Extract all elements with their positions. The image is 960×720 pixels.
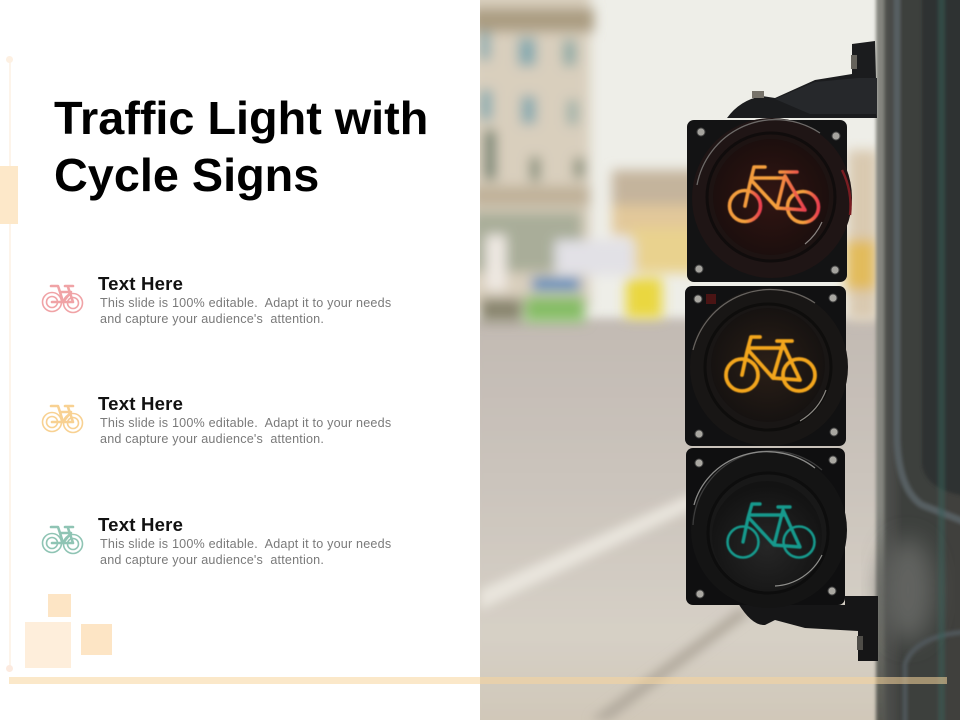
upper mounting bracket: [727, 41, 877, 118]
icon: pink bicycle: [42, 284, 84, 314]
photo: traffic light with cycle signs: [480, 0, 960, 720]
icon: amber bicycle: [42, 404, 84, 434]
street pole: [876, 0, 960, 720]
list item 3: [42, 514, 391, 567]
lower mounting bracket: [738, 596, 878, 661]
decorative left rail: [9, 59, 10, 669]
decorative side block: [0, 166, 18, 224]
item heading: Text Here: [98, 273, 183, 294]
icon: teal bicycle: [728, 504, 814, 558]
item heading: Text Here: [98, 514, 183, 535]
item body text: This slide is 100% editable. Adapt it to your needs and capture your audience's attention.: [100, 416, 391, 446]
icon: red bicycle: [730, 167, 818, 222]
title: [54, 92, 428, 201]
icon: teal bicycle: [42, 526, 84, 554]
decorative square small: [48, 594, 71, 617]
decorative rail dot top: [6, 56, 13, 63]
list item 1: [42, 273, 391, 326]
list item 2: [42, 393, 391, 446]
bottom accent bar: [9, 677, 947, 684]
item heading: Text Here: [98, 393, 183, 414]
title: Cycle Signs: [54, 149, 319, 201]
blurred background scene: [470, 0, 960, 720]
item body text: This slide is 100% editable. Adapt it to your needs and capture your audience's attention.: [100, 296, 391, 326]
decorative square medium: [81, 624, 112, 655]
decorative square large: [25, 622, 71, 668]
signal head: green cycle: [686, 448, 847, 608]
item body text: This slide is 100% editable. Adapt it to your needs and capture your audience's attention.: [100, 537, 391, 567]
decorative rail dot bottom: [6, 665, 13, 672]
title: Traffic Light with: [54, 92, 428, 144]
signal head: amber cycle: [685, 286, 848, 446]
signal head: red cycle: [687, 118, 852, 282]
icon: amber bicycle: [726, 337, 815, 391]
